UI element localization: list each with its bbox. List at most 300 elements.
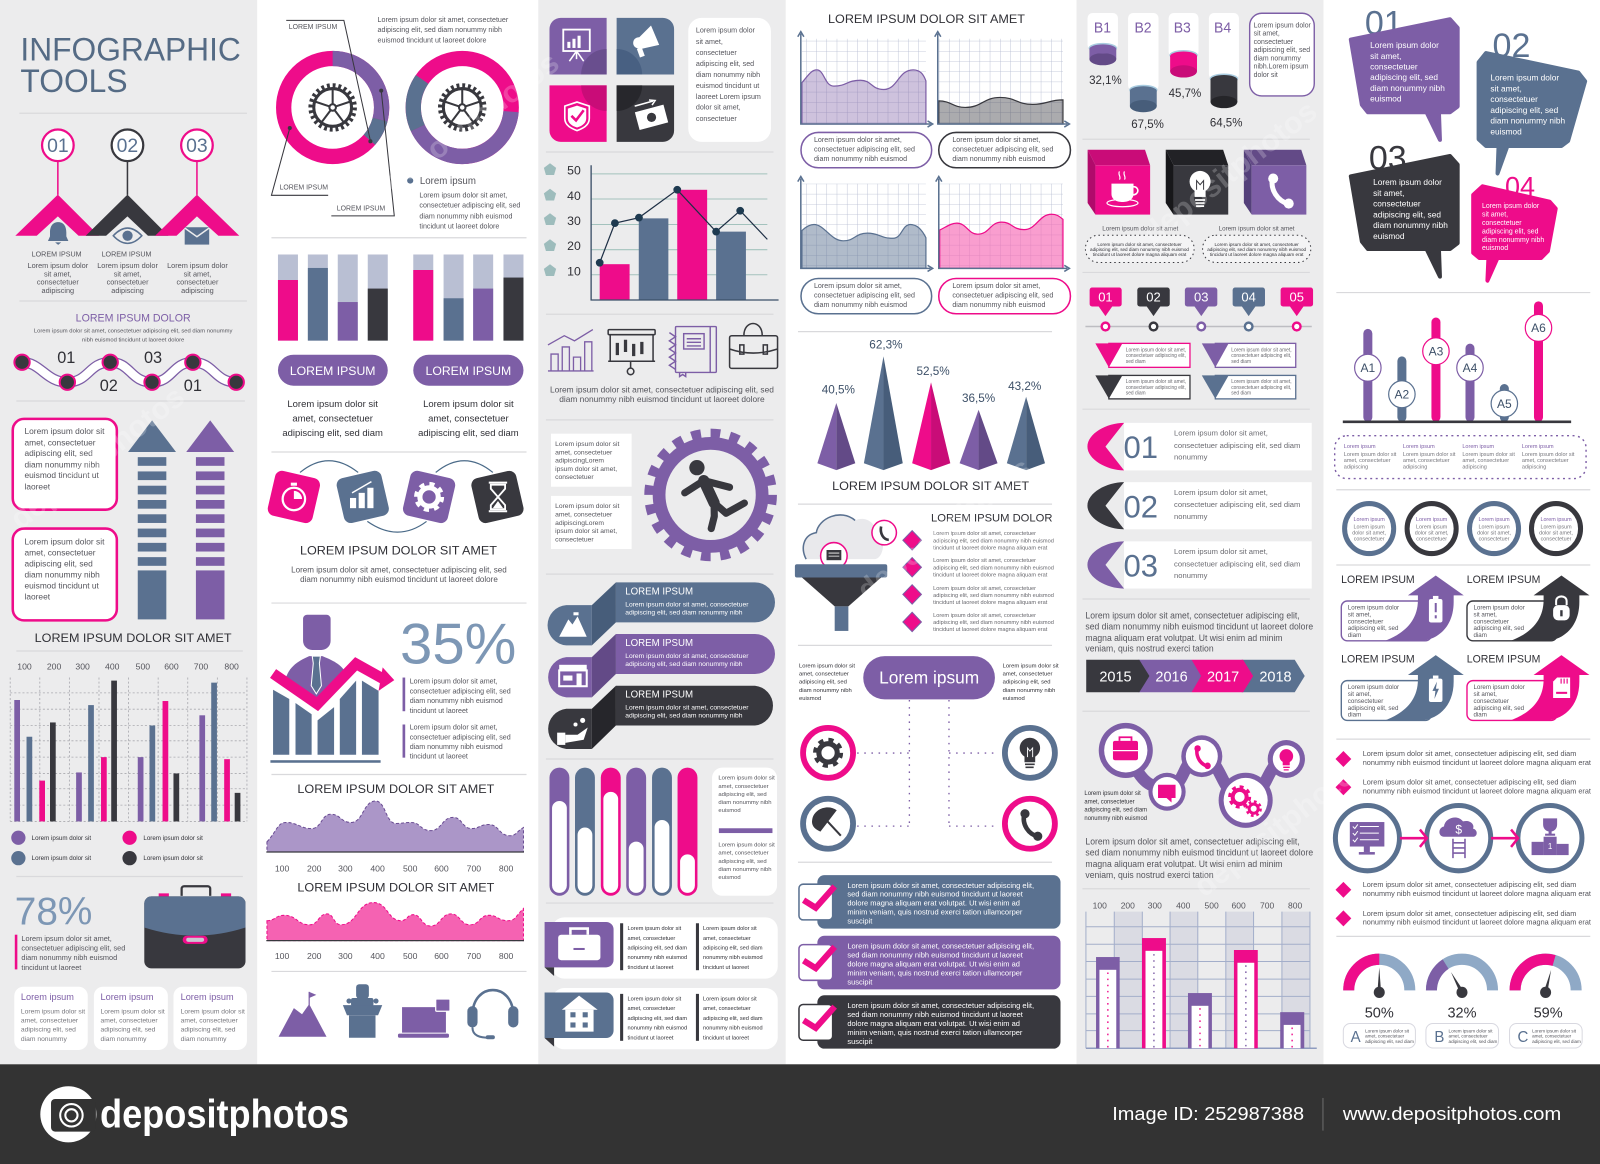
area chart: purple: 600 [434,863,449,873]
arrow card: pink [1467,654,1589,721]
heading: bar chart: LOREM IPSUM DOLOR SIT AMET [35,632,232,645]
main pill: Lorem ipsum [879,668,979,688]
text box 2: euismod tincidunt ut [24,580,100,590]
diamond notes upper: nonummy nibh euismod tincidunt ut laoreet dolore magna aliquam erat [1363,787,1591,796]
chart legend: Lorem ipsum dolor sit [143,835,203,842]
cylinder B2 [1130,86,1157,112]
wave timeline: 01 [184,377,202,395]
icon: growth chart [335,469,390,524]
text left: euismod [799,696,821,702]
area chart: purple: 300 [338,863,353,873]
gauge C: 59% [1534,1005,1563,1021]
stat: 78% [15,890,125,972]
speech bubble 04 [1473,171,1556,281]
text left [799,663,855,702]
cylinder gauges: 67,5% [1131,118,1164,131]
year arrows: 2015 [1099,670,1132,686]
ring text circles: Lorem ipsum [1478,524,1510,530]
dotted caption left: Lorem ipsum dolor sit amet, consectetuer [1097,242,1182,247]
text box: gear left 2: adipiscingLorem [555,520,604,527]
pill button 2: LOREM IPSUM [426,364,511,378]
info card: house: nonummy nibh euismod [628,1026,687,1032]
paragraph: Lorem ipsum dolor sit amet, consectetuer adipiscing elit, [1085,610,1300,620]
card row: three lorem cards: Lorem ipsum dolor sit [21,1008,85,1015]
numbered row 01: nonummy [1174,453,1208,462]
icon: line chart outline [548,330,594,371]
title: INFOGRAPHIC [20,31,241,68]
stat: 35%: diam nonummy nibh euismod [410,743,503,751]
ribbon 2 [548,634,775,697]
step number circles [42,129,213,161]
area chart: purple: LOREM IPSUM DOLOR SIT AMET [297,783,494,796]
text: depositphotos [377,45,565,199]
area chart: pink: 800 [499,951,514,961]
arrow card: slate: LOREM IPSUM [1341,654,1415,666]
text left: diam nonummy nibh [799,688,852,694]
arrow card: purple: adipiscing elit, sed [1348,625,1399,632]
cylinder gauges: 32,1% [1089,74,1122,87]
text right: diam nonummy nibh [1003,688,1055,694]
step captions [28,251,228,295]
ribbon 2: adipiscing elit, sed diam nonummy nibh [625,661,743,668]
step captions: sit amet, [184,270,211,279]
year arrows: 2016 [1155,670,1188,686]
area chart: pink: LOREM IPSUM DOLOR SIT AMET [297,881,494,894]
area chart: pink: 500 [403,951,418,961]
stat: 35%: consectetuer adipiscing elit, sed [410,733,511,741]
ribbon 3: Lorem ipsum dolor sit amet, consectetuer [625,705,749,712]
text: top right [378,16,509,44]
funnel list: tincidunt ut laoreet dolore magna aliquam erat [933,627,1048,633]
icon: gear circle [803,728,853,778]
stat: 78%: Lorem ipsum dolor sit amet, [21,934,112,943]
gauge B: Lorem ipsum dolor sit [1449,1028,1493,1033]
info card: house: adipiscing elit, sed diam [628,1016,687,1022]
small ribbon notes: consectetuer adipiscing elit, [1126,353,1186,359]
speech bubble 03: sit amet, [1373,188,1405,198]
paragraph 2: veniam, quis nostrud exerci tation [1085,870,1214,880]
ribbon 2: LOREM IPSUM [625,638,693,649]
cylinder gauges [1088,13,1242,131]
pyramid chart: 36,5% [962,392,995,405]
dotted legend box: Lorem ipsum dolor sit [1403,452,1456,458]
arrow card: dark: Lorem ipsum dolor [1473,604,1525,612]
banner slate: Lorem ipsum dolor sit amet, consectetuer adipiscing elit, [847,881,1034,890]
text right [1003,663,1059,702]
arrow card: slate [1341,654,1464,721]
year arrows [1086,660,1305,692]
text box: gear left 1: Lorem ipsum dolor sit [555,441,619,448]
bars [273,681,379,755]
ribbon 3: LOREM IPSUM [625,689,693,700]
chevrons [15,161,239,236]
dotted caption right: tincidunt ut laoreet dolore magna aliquam erat [1210,252,1304,257]
icon: coffee cube [1088,150,1150,215]
text right: euismod [1003,696,1025,702]
person [285,615,347,704]
text box 1: Lorem ipsum dolor sit [24,426,105,436]
funnel list: LOREM IPSUM DOLOR [931,512,1052,524]
info card: house: tincidunt ut laoreet [628,1035,674,1041]
donut leader lines: LOREM IPSUM [337,206,385,213]
gauge B: amet, consectetuer [1449,1034,1488,1039]
paragraph 2 [1085,837,1313,880]
ring text circles [1345,504,1581,554]
step captions: sit amet, [114,270,141,279]
arrow: slate striped [128,420,176,619]
arrows [1400,830,1518,847]
speech bubble 03: consectetuer [1373,199,1421,209]
bar 1 [1096,957,1120,1048]
arrow card: slate: diam [1348,712,1361,719]
step captions: consectetuer [176,278,219,287]
stat: 35%: 35% [400,612,516,676]
gauge C: adipiscing elit, sed diam [1532,1039,1581,1044]
area chart: purple: 800 [499,863,514,873]
ring text circles: Lorem ipsum [1354,517,1385,523]
info card: briefcase [545,917,778,979]
ring text circles: Lorem ipsum [1540,524,1572,530]
chart legend [11,831,203,865]
chart legend: Lorem ipsum dolor sit [143,855,203,862]
text card: tile description: adipiscing elit, sed [696,60,754,68]
text box 1: diam nonummy nibh [24,459,100,469]
dotted legend box: amet, consectetuer [1522,458,1569,464]
dotted caption right [1203,226,1311,262]
text box: gear left 1: ipsum dolor sit amet, [555,466,617,473]
text: icon caption: diam nonummy nibh euismod tincidunt ut laoreet dolore [559,394,765,404]
dotted legend box: Lorem ipsum [1462,444,1495,450]
icon: gear [311,86,355,129]
text: top right: adipiscing elit, sed diam nonummy nibh [378,26,502,34]
icon: phone circle [1005,799,1055,849]
cylinder gauges: 64,5% [1210,116,1242,129]
icon: mountain flag [279,992,327,1037]
caption pills: Lorem ipsum dolor sit amet, [952,282,1040,290]
banner purple: Lorem ipsum dolor sit amet, consectetuer adipiscing elit, [847,941,1034,950]
arrow card: purple: diam [1348,632,1361,639]
icon: money cloud ladder [1439,817,1477,858]
ring text circles: Lorem ipsum [1540,517,1572,523]
gauge B: B [1434,1029,1444,1046]
ring text circles: consectetuer [1416,536,1447,542]
banner purple [799,936,1061,989]
icon: speaker at podium [343,984,382,1038]
dotted legend box: Lorem ipsum dolor sit [1522,452,1575,458]
ring text circles: consectetuer [1354,536,1385,542]
ribbon 1: Lorem ipsum dolor sit amet, consectetuer [625,602,749,609]
text: icon caption [550,384,774,404]
speech bubble 01 [1351,4,1458,140]
arrow card: dark: adipiscing elit, sed [1473,625,1525,632]
pin timeline: 04 [1241,290,1256,305]
funnel graphic [795,515,896,631]
speech bubble 02: sit amet, [1490,84,1522,94]
arrow card: pink: diam [1473,712,1487,719]
bar 2 [1142,938,1166,1048]
card row: three lorem cards: diam nonummy [101,1036,147,1043]
stacked bars 2 [413,254,523,341]
text card: pills: amet, consectetuer [718,851,769,857]
icon: envelope [185,227,209,245]
text card: pills [712,768,777,896]
speech bubble 04: consectetuer [1482,220,1522,227]
step captions: Lorem ipsum dolor [28,261,89,270]
text box 2: laoreet [24,591,51,601]
pill button 2 [413,355,523,386]
text card: cylinders: nibh.Lorem ipsum [1254,64,1309,71]
speech bubble 04: sit amet, [1482,212,1508,219]
stat: 35%: tincidunt ut laoreet [410,707,468,715]
text: top right: Lorem ipsum dolor sit amet, consectetuer [378,16,509,24]
ring text circles: dolor sit amet, [1477,530,1511,536]
lollipop chart: A3 [1429,345,1444,359]
arrow card: dark: LOREM IPSUM [1467,574,1540,586]
step captions: adipiscing [111,286,144,295]
bar chart: 800 [224,661,239,671]
cylinder B1 [1089,44,1116,65]
step number circles: 03 [186,135,208,157]
icon: bulb cube [1166,150,1228,215]
numbered row 01: 01 [1123,430,1158,465]
gridded bar chart: 100 [1093,901,1107,911]
funnel list: adipiscing elit, sed diam nonummy nibh euismod [933,593,1054,599]
text card: cylinders: Lorem ipsum dolor [1254,23,1312,30]
numbered row 03: nonummy [1174,571,1208,580]
bar chart: 400 [105,661,120,671]
dotted caption right: Lorem ipsum dolor sit amet, consectetuer [1215,242,1299,247]
ring text circles: Lorem ipsum [1478,517,1510,523]
speech bubble 03: 03 [1369,139,1407,177]
chart legend: Lorem ipsum dolor sit [32,855,91,862]
funnel list: adipiscing elit, sed diam nonummy nibh euismod [933,538,1054,544]
bar chart: 500 [136,661,150,671]
process flow [1335,806,1582,871]
text box: gear left 2 [551,496,632,549]
cloud [803,515,883,559]
dotted legend box: adipiscing [1522,464,1546,470]
stat: 35%: consectetuer adipiscing elit, sed [410,687,511,695]
numbered row 03: Lorem ipsum dolor sit amet, [1174,547,1268,556]
ring text circles: Lorem ipsum [1416,524,1448,530]
runner [685,460,744,529]
icon: toolbox [1113,737,1138,760]
text right: adipiscing elit, sed [1003,680,1051,686]
banner dark: Lorem ipsum dolor sit amet, consectetuer adipiscing elit, [847,1001,1034,1010]
caption pills: diam nonummy nibh euismod [952,301,1045,309]
info card: house: adipiscing elit, sed diam [703,1016,763,1022]
cylinder gauges: B3 [1174,20,1191,36]
dotted caption right: adipiscing elit, sed diam nonummy nibh euismod [1207,247,1307,252]
text box: gear left 2: ipsum dolor sit amet, [555,528,617,535]
numbered row 02 [1087,482,1312,529]
speech bubble 01: euismod [1370,93,1402,104]
text: depositphotos [4,380,191,536]
area chart: pink: 200 [307,951,322,961]
lollipop chart: A4 [1463,361,1478,375]
grid chart A [798,32,933,127]
funnel list: Lorem ipsum dolor sit amet, consectetuer [933,613,1036,619]
ribbon 3: adipiscing elit, sed diam nonummy nibh [625,713,743,720]
donut chart 2 [413,58,511,156]
paragraph 2: magna aliquam erat volutpat. Ut wisi enim ad minim [1085,859,1282,869]
icon: headset [467,990,518,1039]
combo chart: 50 [567,163,581,177]
icon: eye [113,228,142,243]
diamond notes upper: Lorem ipsum dolor sit amet, consectetuer adipiscing elit, sed diam [1363,749,1576,758]
gridded bar chart: 400 [1176,901,1191,911]
stat: 35%: Lorem ipsum dolor sit amet, [410,724,498,732]
text card: pills: adipiscing elit, sed [718,792,767,798]
small ribbon notes: sed diam [1126,390,1146,396]
paragraph: sed diam nonummy nibh euismod tincidunt ut laoreet dolore [1085,622,1313,632]
banner purple: dolore magna aliquam erat volutpat. Ut wisi enim ad [847,959,1020,968]
icon: bell [48,222,68,245]
funnel list: tincidunt ut laoreet dolore magna aliquam erat [933,573,1048,579]
caption 2: adipiscing elit, sed diam [418,428,519,439]
wave timeline: 03 [144,349,162,367]
donut leader lines [271,20,394,216]
area chart: pink [266,881,524,961]
text card: pills: Lorem ipsum dolor sit [718,842,775,848]
bar chart: 600 [164,661,179,671]
step captions: consectetuer [107,278,149,287]
caption pills: Lorem ipsum dolor sit amet, [952,136,1040,144]
arrow card: pink: consectetuer [1473,698,1509,705]
image id: Image ID: 252987388 [1112,1103,1304,1124]
pin timeline: 02 [1146,290,1161,305]
cylinder B4 [1211,75,1237,108]
area chart: purple [266,783,524,873]
donut leader lines: LOREM IPSUM [280,184,328,191]
ribbon 2: Lorem ipsum dolor sit amet, consectetuer [625,653,749,660]
area chart: pink: 300 [338,951,353,961]
text box: gear left 2: amet, consectetuer [555,512,613,519]
text card: tile description: consectetuer [696,115,737,123]
step captions: consectetuer [37,278,79,287]
text: donut caption: diam nonummy nibh euismod [419,212,512,220]
text left: Lorem ipsum dolor sit [799,663,855,669]
dotted caption left [1085,226,1194,262]
text card: pills: diam nonummy nibh [718,867,772,873]
icon: money cloud ladder: $ [1455,823,1462,837]
text card: tile description: euismod tincidunt ut [696,82,759,90]
ribbon 1: adipiscing elit, sed diam nonummy nibh [625,610,743,617]
ring text circles: dolor sit amet, [1539,530,1573,536]
icon: phone cube [1244,150,1306,215]
caption 1: amet, consectetuer [292,414,373,425]
text card: pills: amet, consectetuer [718,784,769,790]
numbered row 03: consectetuer adipiscing elit, sed diam [1174,559,1300,568]
numbered row 02: 02 [1123,489,1158,524]
text card: cylinders: adipiscing elit, sed [1254,47,1310,54]
text: depositphotos [851,451,1038,608]
caption 1: Lorem ipsum dolor sit [287,399,378,410]
area chart: pink: 700 [467,951,481,961]
gridded bar chart [1086,901,1317,1048]
step number circles: 02 [117,135,138,157]
card row: three lorem cards [14,987,247,1050]
small ribbon notes: sed diam [1231,359,1251,365]
caption pills: diam nonummy nibh euismod [814,301,907,309]
wave timeline: 02 [100,377,118,395]
small ribbon notes: consectetuer adipiscing elit, [1231,353,1291,359]
gauge B: 32% [1447,1005,1476,1021]
text box 1 [13,419,117,510]
bar 5 [1280,1012,1304,1048]
dotted legend box: Lorem ipsum [1344,444,1376,450]
info card: briefcase: Lorem ipsum dolor sit [703,926,757,932]
text box 2: amet, consectetuer [24,548,96,558]
text box 1: laoreet [24,481,51,491]
arrow card: purple: consectetuer [1348,618,1383,625]
gridded bar chart: 300 [1148,901,1162,911]
text box 2: adipiscing elit, sed [24,558,93,568]
dotted legend box: adipiscing [1462,464,1487,470]
speech bubble 01: adipiscing elit, sed [1370,72,1438,82]
bar chart: 100 [17,661,32,671]
gauge A [1343,959,1415,1048]
card row: three lorem cards: amet, consectetuer [21,1017,79,1024]
year arrows: 2017 [1207,670,1239,686]
heading: lorem ipsum dolor [34,312,233,343]
arrow card: slate: Lorem ipsum dolor [1348,684,1399,691]
icon: bulb [1280,749,1293,770]
speech bubble 02: diam nonummy nibh [1490,115,1565,125]
speech bubble 04: euismod [1482,245,1508,252]
info card: house [545,988,778,1049]
step captions: Lorem ipsum dolor [167,261,228,270]
gridded bar chart: 800 [1288,901,1302,911]
pyramid chart: 43,2% [1008,380,1041,393]
area chart: purple: 200 [307,863,322,873]
chain caption [1084,791,1147,822]
diamond notes upper: Lorem ipsum dolor sit amet, consectetuer adipiscing elit, sed diam [1363,778,1576,787]
funnel list: tincidunt ut laoreet dolore magna aliquam erat [933,600,1048,606]
arrow card: pink: LOREM IPSUM [1467,654,1540,666]
area chart: purple: 400 [370,863,385,873]
small ribbon notes: Lorem ipsum dolor sit amet, [1126,379,1186,385]
text box: gear left 1 [551,434,632,487]
card row: three lorem cards: adipiscing elit, sed [21,1027,76,1034]
area chart: pink: 100 [275,951,289,961]
info card: briefcase: amet, consectetuer [703,936,751,942]
website: www.depositphotos.com [1342,1103,1561,1124]
text: icon caption: Lorem ipsum dolor sit amet, consectetuer adipiscing elit, sed [550,384,774,394]
text box: gear left 1: consectetuer [555,474,594,481]
card row: three lorem cards: diam nonummy [21,1036,67,1043]
gridded bar chart: 200 [1121,901,1135,911]
text box 2: Lorem ipsum dolor sit [24,536,105,546]
arrow card: purple [1341,574,1464,641]
diamond notes lower [1335,880,1591,927]
lollipop chart: A5 [1497,397,1512,411]
combo chart [544,163,779,300]
heading: area grid charts: LOREM IPSUM DOLOR SIT AMET [828,13,1025,26]
wave timeline [14,349,244,395]
logo [40,1086,349,1142]
heading: lorem ipsum dolor: LOREM IPSUM DOLOR [76,312,191,324]
step captions: sit amet, [44,270,72,279]
text box: gear left 1: amet, consectetuer [555,449,613,456]
heading: lorem ipsum dolor: nibh euismod tincidunt ut laoreet dolore [82,337,184,343]
gauge B [1426,959,1499,1048]
banner slate: suscipit [847,917,873,926]
ring text circles: dolor sit amet, [1415,530,1449,536]
card row: three lorem cards: adipiscing elit, sed [101,1027,156,1034]
speech bubble 01: 01 [1365,4,1403,43]
speech bubble 04: Lorem ipsum dolor [1482,203,1540,210]
